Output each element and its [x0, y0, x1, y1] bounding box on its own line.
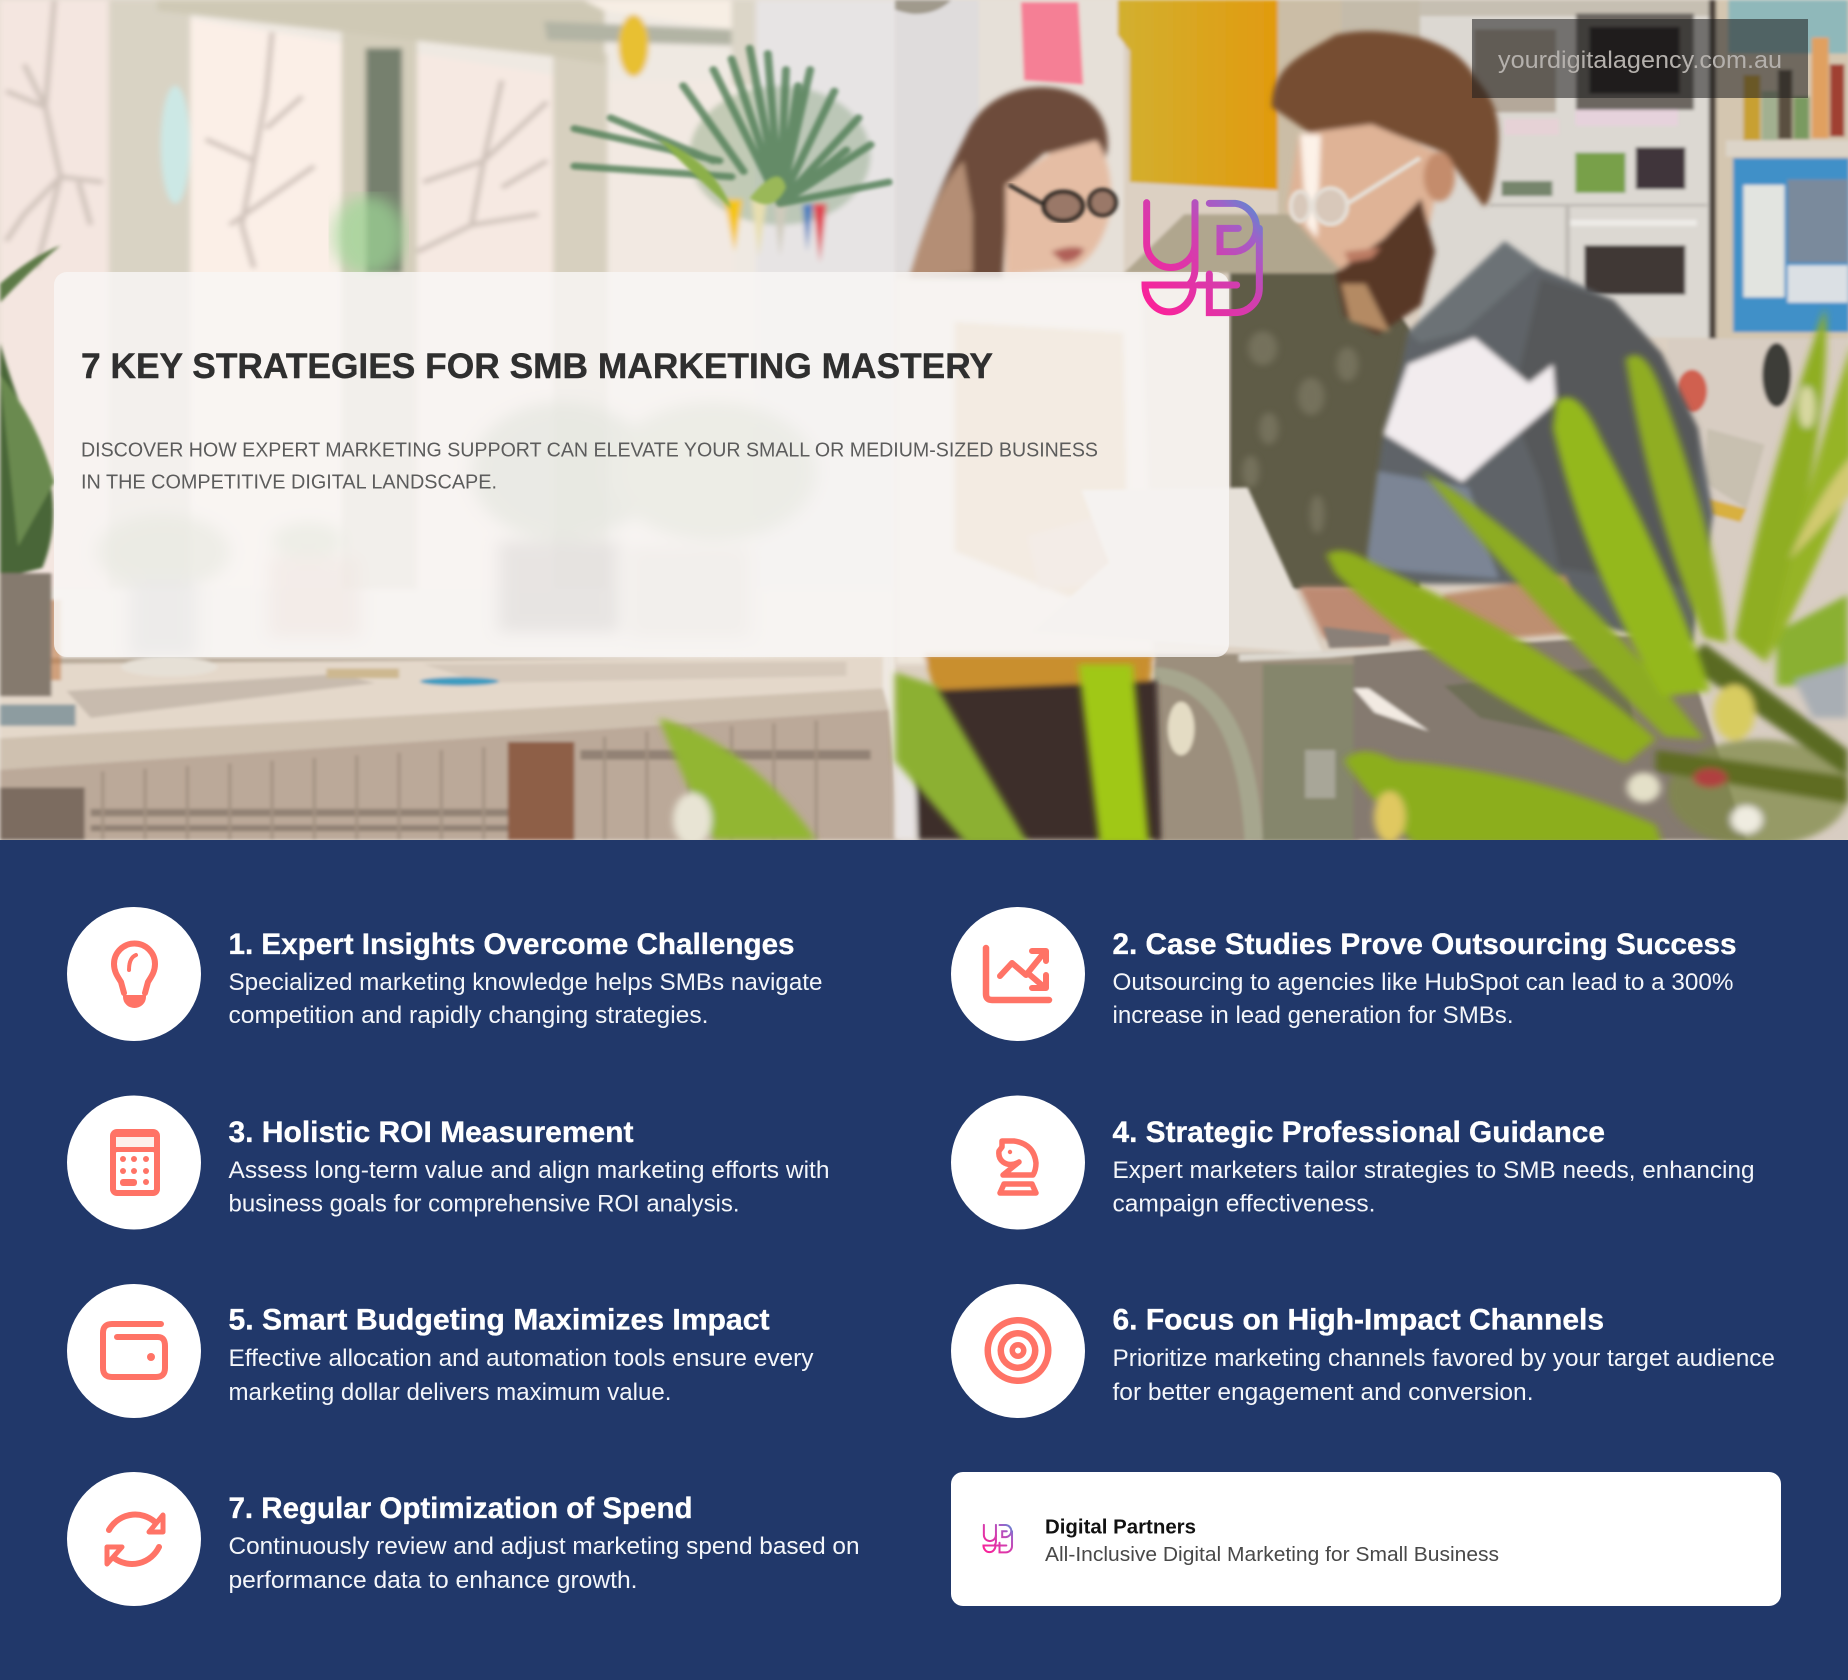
icon: target: [951, 1284, 1085, 1418]
item 3: [67, 1096, 830, 1230]
item 5 heading: 5. Smart Budgeting Maximizes Impact: [228, 1304, 770, 1336]
man arm and hand: [1420, 576, 1583, 646]
windows and wall: [0, 0, 895, 724]
background wall and boards: [895, 0, 1848, 842]
sill plants behind panel: [97, 402, 816, 656]
brand name: Digital Partners: [1045, 1516, 1196, 1538]
lower room: [1154, 654, 1359, 841]
icon: calculator: [67, 1096, 201, 1230]
item 1 body: Specialized marketing knowledge helps SMBs navigate: [228, 969, 822, 996]
item 1 body: competition and rapidly changing strategies.: [228, 1002, 708, 1029]
item 2: [951, 907, 1736, 1041]
website badge: [1472, 19, 1808, 98]
item 2 body: increase in lead generation for SMBs.: [1112, 1002, 1514, 1029]
item 6 heading: 6. Focus on High-Impact Channels: [1112, 1304, 1604, 1336]
man shirt: [1366, 241, 1713, 643]
subtitle: [81, 440, 1098, 494]
item 3 body: business goals for comprehensive ROI analysis.: [228, 1190, 740, 1218]
woman: [895, 87, 1161, 840]
item 3 heading: 3. Holistic ROI Measurement: [228, 1116, 634, 1149]
blurred foreground plant: [659, 718, 816, 846]
item 4 heading: 4. Strategic Professional Guidance: [1112, 1116, 1605, 1149]
foreground leaves: [895, 308, 1848, 846]
window tree shadows: [6, 0, 547, 268]
photo left half: windows, palm and counter: [0, 0, 949, 846]
item 4 body: campaign effectiveness.: [1112, 1190, 1376, 1218]
item 6 body: [1112, 1345, 1775, 1406]
item 6 body: for better engagement and conversion.: [1112, 1379, 1534, 1406]
icon: light bulb: [67, 907, 201, 1041]
item 4: [951, 1096, 1754, 1230]
item 4 body: Expert marketers tailor strategies to SMB needs, enhancing: [1112, 1157, 1754, 1184]
website badge: yourdigitalagency.com.au: [1498, 47, 1782, 74]
logo: [1145, 203, 1259, 313]
laptop: [1032, 487, 1432, 662]
icon: chart: [951, 907, 1085, 1041]
woman face: [1006, 140, 1112, 276]
lower navy section: [0, 840, 1848, 1680]
item 3 body: Assess long-term value and align marketing efforts with: [228, 1157, 830, 1184]
icon: wallet: [67, 1284, 201, 1418]
man face: [1287, 124, 1444, 271]
item 6 body: Prioritize marketing channels favored by your target audience: [1112, 1345, 1775, 1372]
plant behind figures: [1124, 214, 1372, 273]
item 3 body: [228, 1157, 830, 1218]
woman glasses: [1009, 185, 1116, 221]
item 5 body: Effective allocation and automation tools ensure every: [228, 1345, 814, 1372]
subtitle: IN THE COMPETITIVE DIGITAL LANDSCAPE.: [81, 472, 497, 494]
footer brand card: [951, 1472, 1781, 1606]
small logo: [983, 1525, 1012, 1552]
palm yellow leaves: [659, 139, 786, 209]
item 2 heading: 2. Case Studies Prove Outsourcing Success: [1112, 928, 1736, 961]
icon: chess knight: [951, 1096, 1085, 1230]
plant leaf texture: [1242, 331, 1358, 534]
icon: refresh arrows: [67, 1472, 201, 1606]
man beard: [1335, 198, 1435, 335]
subtitle: DISCOVER HOW EXPERT MARKETING SUPPORT CAN ELEVATE YOUR SMALL OR MEDIUM-SIZED BUSINESS: [81, 440, 1098, 462]
item 5: [67, 1284, 814, 1418]
radiator: [0, 710, 901, 840]
man: [1272, 31, 1713, 646]
item 2 body: Outsourcing to agencies like HubSpot can lead to a 300%: [1112, 969, 1734, 996]
item 7 body: Continuously review and adjust marketing spend based on: [228, 1533, 860, 1560]
counter top: [0, 656, 883, 738]
brand tagline: All-Inclusive Digital Marketing for Small Business: [1045, 1544, 1499, 1566]
item 1: [67, 907, 822, 1041]
item 1 heading: 1. Expert Insights Overcome Challenges: [228, 928, 794, 961]
item 7 body: [228, 1533, 860, 1594]
item 5 body: [228, 1345, 814, 1406]
counter, radiator and left plant: [0, 245, 901, 840]
palm plant: [574, 48, 889, 204]
item 7: [67, 1472, 860, 1606]
header photo: office scene: [0, 0, 1848, 846]
title: 7 KEY STRATEGIES FOR SMB MARKETING MASTERY: [81, 347, 993, 386]
item 7 body: performance data to enhance growth.: [228, 1567, 638, 1594]
colored sticks: [724, 199, 742, 252]
item 7 heading: 7. Regular Optimization of Spend: [228, 1492, 692, 1525]
lens flare: [333, 196, 405, 276]
item 2 body: [1112, 969, 1734, 1029]
photo right half: woman, man, boards and leaves: [895, 0, 1848, 846]
item 5 body: marketing dollar delivers maximum value.: [228, 1379, 672, 1406]
woman hair: [909, 87, 1108, 279]
item 1 body: [228, 969, 822, 1029]
woman body and cardigan: [896, 657, 1158, 668]
pot on counter: [0, 573, 51, 696]
item 6: [951, 1284, 1775, 1418]
man glasses: [1291, 158, 1420, 224]
translucent title panel: [54, 272, 1229, 657]
item 4 body: [1112, 1157, 1754, 1218]
man hair: [1272, 31, 1499, 206]
